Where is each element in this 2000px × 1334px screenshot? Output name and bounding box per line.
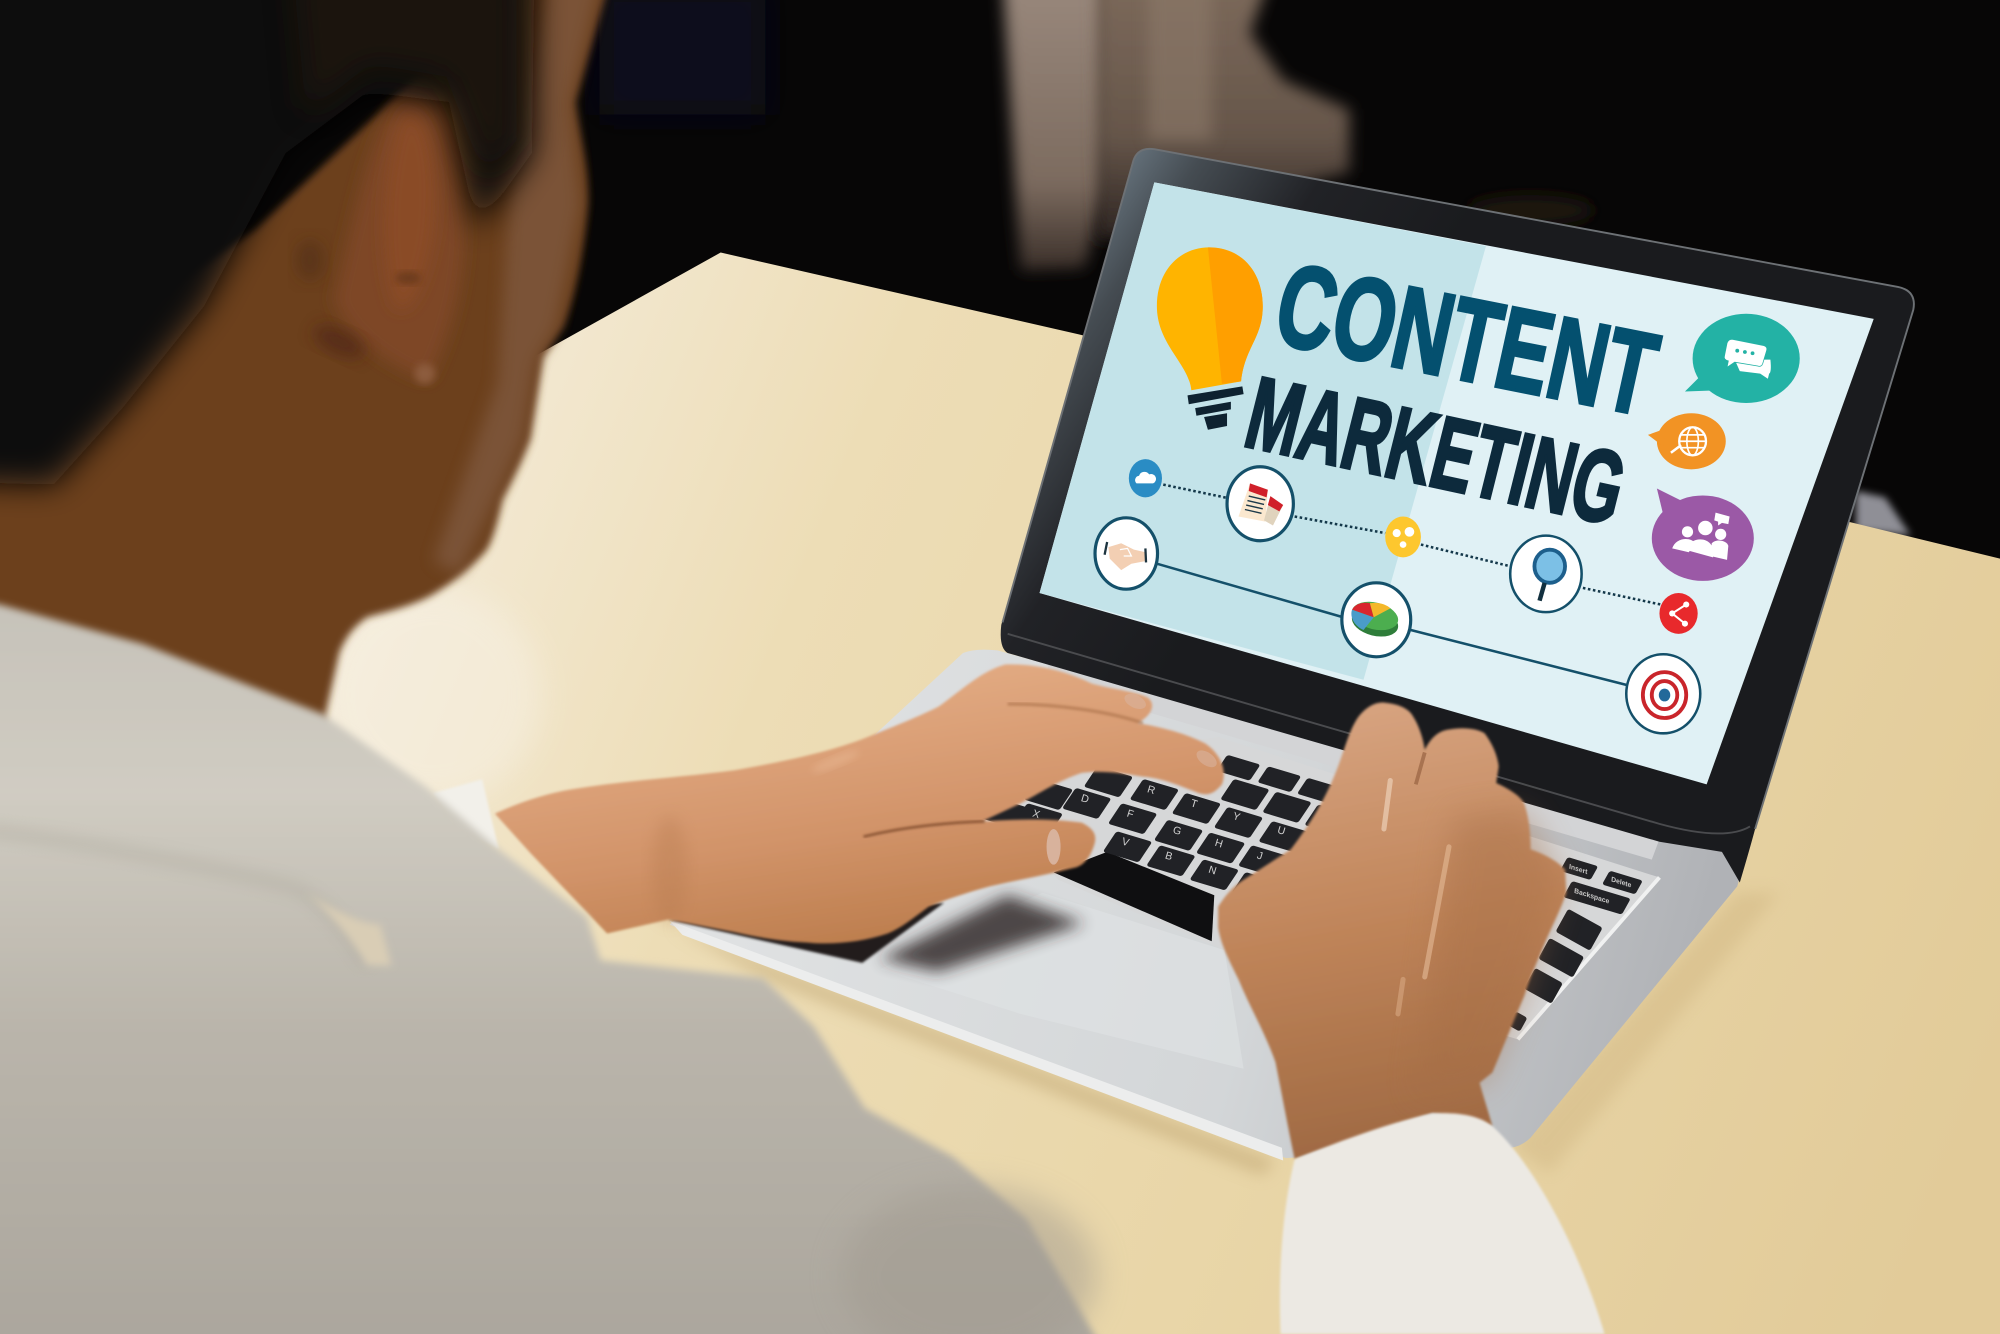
keyboard right keys: Delete [1611,876,1632,890]
icon: team bubble [1652,488,1754,581]
key letters: N [1207,864,1218,877]
dotted timeline [1163,485,1661,605]
key letters: U [1276,824,1287,838]
keyboard right keys: Backspace [1574,888,1610,906]
screen [1040,182,1874,784]
lower shoulder shadow [842,1186,1097,1334]
laptop base [670,650,1739,1158]
dark reflection beside the wrist [668,903,944,963]
icon: target [1626,654,1700,733]
icon: pie chart [1342,583,1411,657]
keyboard right keys: Insert [1569,864,1588,876]
right shirt cuff [1280,1113,1605,1334]
key letters: X [1031,808,1041,821]
icon: red share [1659,593,1698,634]
key letters: R [1146,783,1157,797]
trackpad [880,893,1244,1069]
laptop [668,650,1739,1161]
tendon highlights [1384,781,1449,1014]
key letters: F [1125,808,1136,821]
keyboard right keys [1508,857,1643,1032]
key letters: G [1171,824,1183,838]
keyboard main keys [978,755,1354,903]
fingernails [1047,691,1220,865]
left shirt cuff [432,779,499,849]
icon: handshake [1095,518,1158,589]
darker right side of the hand [1416,810,1562,1097]
trackpad shadow under the hand [880,895,1084,972]
key letters: D [1079,792,1091,806]
key letters [1031,783,1287,877]
collar fold shadow [0,830,367,964]
screen shaded panel [1040,182,1486,680]
knuckle highlights [810,747,861,776]
screen light panel [1040,182,1874,784]
finger gap [1008,704,1143,723]
key letters: V [1120,836,1131,849]
key letters: H [1213,837,1224,851]
neck and head skin [0,0,615,727]
heading: content: CONTENT [1265,238,1668,441]
key letters: J [1256,850,1264,863]
icon: light bulb [1157,247,1263,430]
collar button highlight [306,893,392,965]
hair [0,0,534,485]
icon: cloud [1129,459,1162,497]
icon: chat bubble [1685,314,1800,403]
shirt [0,599,1116,1334]
base front edge [670,921,1283,1161]
wrist shading [652,816,688,923]
right hand on keyboard [1218,702,1566,1159]
crease above thumb [864,821,985,837]
ear [296,94,464,384]
key letters: B [1164,850,1174,863]
icon: magnifier [1510,536,1582,612]
icon: globe bubble [1648,413,1726,469]
pale skin along the face edge [434,0,602,574]
heading: marketing: MARKETING [1236,356,1636,547]
brown hair tint near the temple [293,0,517,179]
left hand on keyboard [495,664,1224,943]
finger gap [1416,752,1425,784]
hinge strip [1046,663,1659,860]
wooden desk [306,253,2000,1334]
key letters: Y [1231,810,1242,824]
icon: documents [1227,467,1293,541]
icon: yellow gears [1385,517,1421,557]
key letters: T [1189,797,1199,811]
keyboard well [995,737,1659,1039]
person seen from behind [0,0,1116,1334]
laptop lid with bezel [1001,149,1914,883]
solid timeline [1157,564,1626,685]
